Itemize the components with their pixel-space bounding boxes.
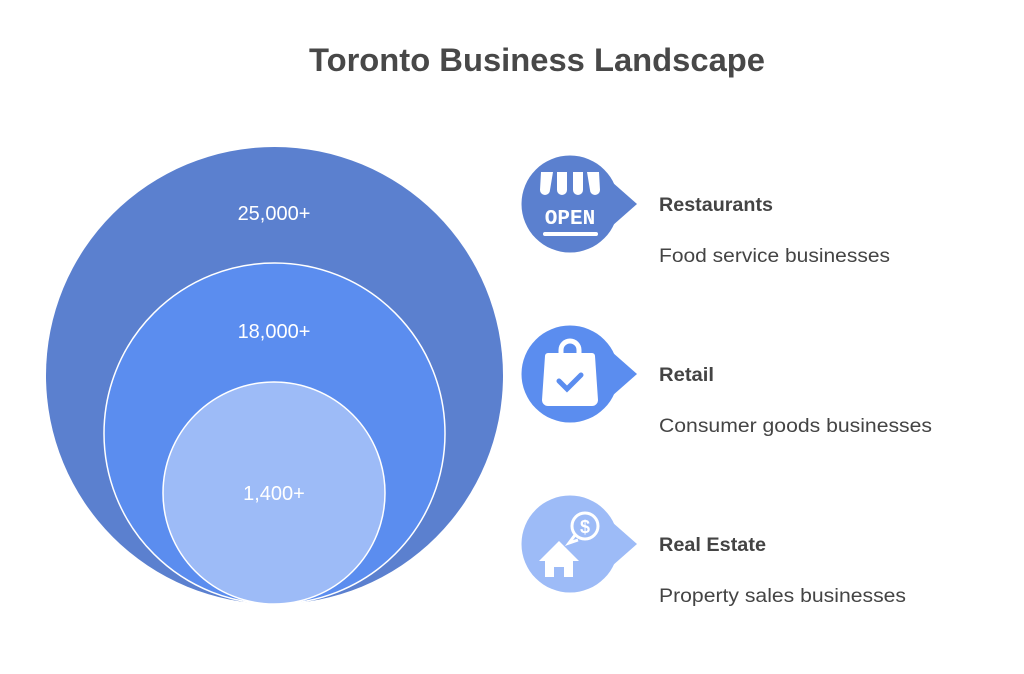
text block: restaurants	[659, 195, 890, 267]
nested circle chart	[46, 147, 503, 604]
icon: open sign	[522, 156, 637, 252]
text block: real estate: Property sales businesses	[659, 586, 906, 607]
text block: retail: Consumer goods businesses	[659, 416, 932, 437]
text block: restaurants: Restaurants	[659, 195, 773, 216]
title: Toronto Business Landscape	[309, 42, 765, 78]
circle: 25,000+: 25,000+	[238, 203, 310, 225]
circle: 18,000+: 18,000+	[238, 321, 310, 343]
text block: retail	[659, 365, 932, 437]
circle: 1,400+: 1,400+	[243, 483, 305, 505]
icon: shopping bag	[522, 326, 637, 422]
icon: house with dollar	[522, 496, 637, 592]
text block: restaurants: Food service businesses	[659, 246, 890, 267]
circle: 18,000+	[104, 263, 445, 604]
text block: real estate	[659, 535, 906, 607]
circle: 1,400+	[163, 382, 385, 604]
text block: real estate: Real Estate	[659, 535, 766, 556]
text block: retail: Retail	[659, 365, 714, 386]
icon: open sign: OPEN	[545, 208, 595, 231]
icon: house with dollar: $	[580, 517, 590, 537]
